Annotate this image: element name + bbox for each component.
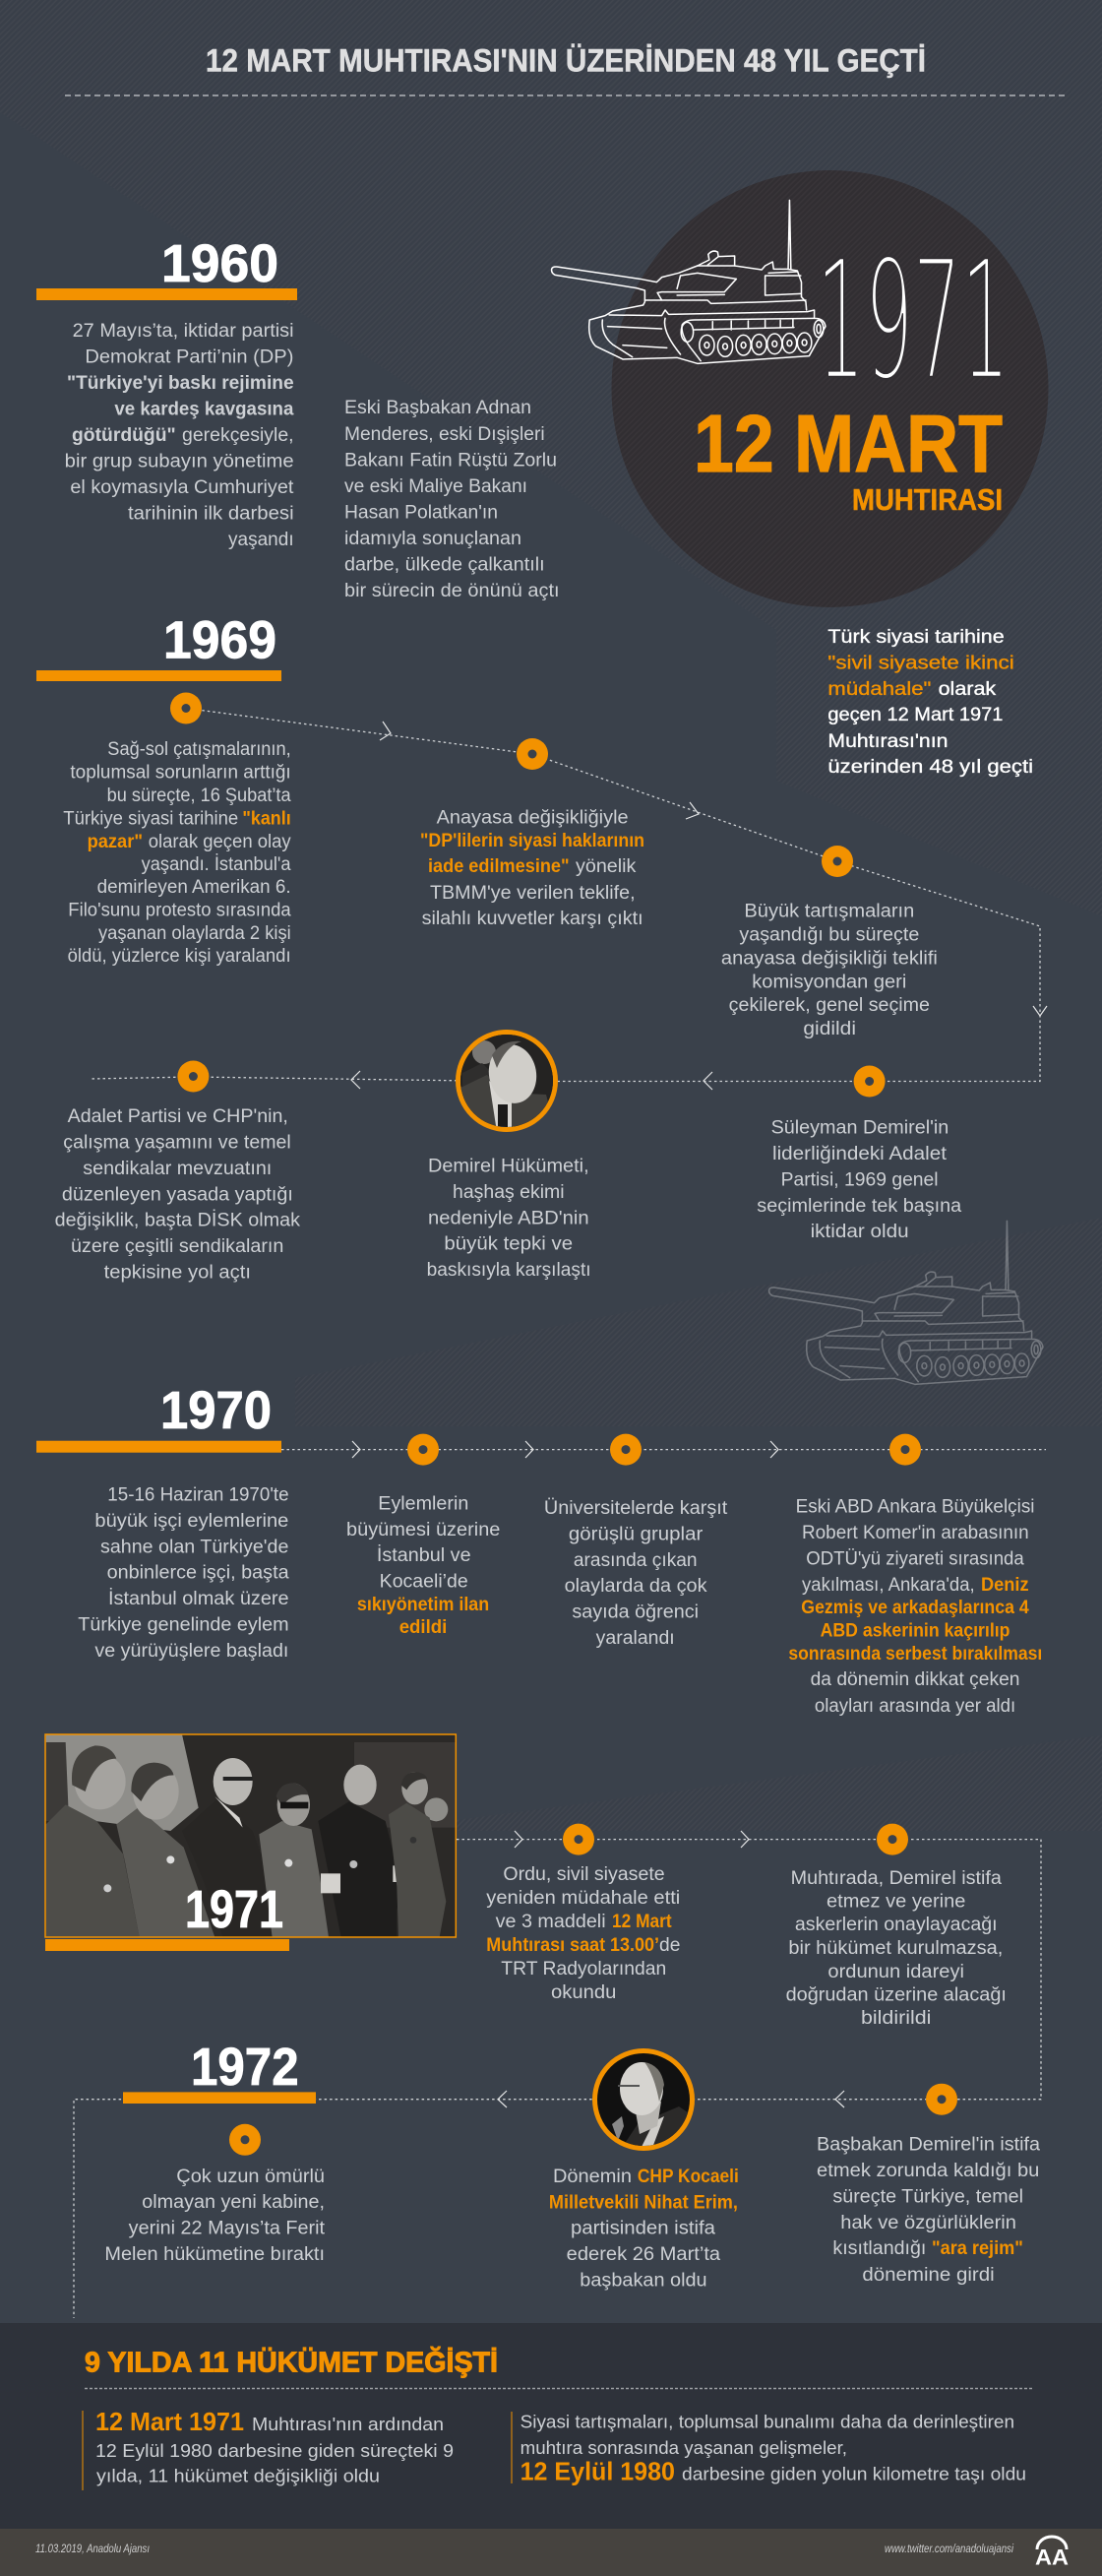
text: anayasa değişikliği: iade edilmesine" xyxy=(428,856,570,877)
heading: 1970 xyxy=(36,1381,281,1453)
text: Nihat Erim: başbakan oldu xyxy=(580,2271,707,2292)
arrow xyxy=(704,1072,712,1090)
arrow xyxy=(741,1831,749,1848)
arrow xyxy=(835,2091,844,2107)
text: kanlı pazar xyxy=(63,739,291,967)
text: muhtıra içeriği: Muhtırada, Demirel istifa xyxy=(791,1868,1002,1889)
text: Süleyman Demirel: Partisi, 1969 genel xyxy=(781,1170,939,1191)
text: sendikalar: üzere çeşitli sendikaların xyxy=(71,1236,283,1257)
text: Deniz Gezmiş: Gezmiş ve arkadaşlarınca 4 xyxy=(801,1598,1029,1618)
text: genel seçim: gidildi xyxy=(803,1019,856,1039)
text: Deniz Gezmiş: Deniz xyxy=(981,1575,1029,1596)
text: Deniz Gezmiş: Robert Komer'in arabasının xyxy=(802,1523,1029,1543)
text: muhtıra içeriği: doğrudan üzerine alacağı xyxy=(786,1985,1007,2006)
text: intro callout: Muhtırası'nın xyxy=(827,731,948,752)
text: ara rejim xyxy=(817,2134,1040,2286)
text: intro callout: Türk siyasi tarihine xyxy=(827,627,1005,648)
left text: yılda, 11 hükümet değişikliği oldu xyxy=(96,2467,380,2486)
dark circle panel: 12 Mart xyxy=(552,170,1049,607)
text: sıkıyönetim xyxy=(346,1494,500,1638)
right text: 12 Eylül 1980 xyxy=(520,2456,675,2485)
footer xyxy=(0,2529,1102,2576)
text: 1960 right block: Hasan Polatkan'ın xyxy=(344,502,498,524)
text: muhtıra içeriği: etmez ve yerine xyxy=(826,1892,965,1912)
text: 1960 right block: Bakanı Fatin Rüştü Zorlu xyxy=(344,451,557,471)
marker dot xyxy=(877,1824,908,1855)
text: muhtıra içeriği xyxy=(786,1868,1007,2029)
left text: 12 Eylül 1980 darbesine giden süreçteki 9 xyxy=(95,2441,454,2461)
marker dot xyxy=(517,738,548,770)
text: kanlı pazar: olarak geçen olay xyxy=(149,832,291,852)
text: 12 Mart saat 13.00 xyxy=(486,1864,680,2003)
marker dot xyxy=(889,1434,921,1466)
arrow xyxy=(525,1441,533,1458)
text: 12 Mart saat 13.00: Ordu, sivil siyasete xyxy=(503,1864,665,1885)
text: genel seçim: Büyük tartışmaların xyxy=(744,902,914,922)
text: Nihat Erim: partisinden istifa xyxy=(571,2219,715,2239)
text: anayasa değişikliği: silahlı kuvvetler karşı çıktı xyxy=(422,909,643,929)
text: 12 Mart saat 13.00: TRT Radyolarından xyxy=(501,1959,666,1979)
text: üniversiteler: arasında çıkan xyxy=(574,1550,698,1571)
text: 1960 left block: el koymasıyla Cumhuriyet xyxy=(70,477,294,498)
text: 12 Mart saat 13.00: ve 3 maddeli xyxy=(496,1912,606,1932)
text: intro callout xyxy=(827,627,1033,778)
text: muhtıra içeriği: ordunun idareyi xyxy=(827,1962,964,1982)
heading: 1972: 1972 xyxy=(191,2038,299,2097)
text: işçi eylemleri: onbinlerce işçi, başta xyxy=(107,1563,289,1584)
left text: 12 Mart 1971 xyxy=(95,2407,244,2436)
arrow xyxy=(686,802,699,819)
text: 1960 right block: idamıyla sonuçlanan xyxy=(344,529,521,549)
text: Deniz Gezmiş: olayları arasında yer aldı xyxy=(815,1696,1015,1717)
text: 1960 left block: gerekçesiyle, xyxy=(182,425,294,446)
marker dot xyxy=(229,2124,261,2156)
text: genel seçim: yaşandığı bu süreçte xyxy=(739,925,919,946)
title: 12 MART MUHTIRASI'NIN ÜZERİNDEN 48 YIL GEÇTİ xyxy=(206,43,926,79)
text: sendikalar: çalışma yaşamını ve temel xyxy=(63,1132,291,1153)
text: genel seçim: anayasa değişikliği teklifi xyxy=(721,949,938,970)
text: 1960 left block: yaşandı xyxy=(228,530,294,550)
text: sendikalar: Adalet Partisi ve CHP'nin, xyxy=(68,1106,288,1127)
text: ara rejim: kısıtlandığı xyxy=(832,2238,926,2259)
heading: 1970: 1970 xyxy=(160,1381,272,1440)
right text: muhtıra sonrasında yaşanan gelişmeler, xyxy=(520,2438,847,2458)
text: intro callout: "sivil siyasete ikinci xyxy=(827,654,1014,674)
text: üniversiteler: olaylarda da çok xyxy=(565,1576,707,1597)
text: haşhaş xyxy=(427,1156,591,1281)
left text xyxy=(83,2407,454,2490)
text: işçi eylemleri: İstanbul olmak üzere xyxy=(108,1589,289,1609)
text: genel seçim: çekilerek, genel seçime xyxy=(729,995,930,1016)
text: Nihat Erim: CHP Kocaeli xyxy=(638,2167,739,2187)
text: haşhaş: büyük tepki ve xyxy=(444,1234,573,1254)
text: işçi eylemleri: büyük işçi eylemlerine xyxy=(94,1511,288,1532)
heading: 9 YILDA 11 HÜKÜMET DEĞİŞTİ xyxy=(85,2345,498,2378)
marker dot xyxy=(854,1065,886,1097)
text: 12 Mart saat 13.00: de xyxy=(659,1935,680,1956)
text: haşhaş: Demirel Hükümeti, xyxy=(428,1156,589,1176)
text: muhtıra içeriği: bir hükümet kurulmazsa, xyxy=(788,1938,1003,1959)
logo: AA xyxy=(1035,2537,1069,2569)
text: intro callout: müdahale" xyxy=(827,679,931,700)
right text: Siyasi tartışmaları, toplumsal bunalımı daha da derinleştiren xyxy=(520,2412,1014,2431)
text: anayasa değişikliği: Anayasa değişikliğiyle xyxy=(437,807,629,828)
text: ara rejim: hak ve özgürlüklerin xyxy=(840,2213,1016,2233)
text: Nihat Erim xyxy=(549,2167,739,2292)
text: üniversiteler: Üniversitelerde karşıt xyxy=(544,1498,728,1519)
text: işçi eylemleri: 15-16 Haziran 1970'te xyxy=(107,1484,289,1506)
text: sendikalar: sendikalar mevzuatını xyxy=(83,1159,272,1179)
heading: Muhtırası: MUHTIRASI xyxy=(852,483,1003,517)
text: ara rejim: dönemine girdi xyxy=(862,2265,995,2286)
text: Deniz Gezmiş: sonrasında serbest bırakılması xyxy=(788,1644,1042,1665)
portrait: Demirel xyxy=(456,1030,558,1132)
text: ara rejim: "ara rejim" xyxy=(932,2238,1023,2259)
text: haşhaş: baskısıyla karşılaştı xyxy=(427,1260,591,1281)
text: kanlı pazar: Türkiye siyasi tarihine xyxy=(63,808,238,829)
text: 1960 left block xyxy=(65,321,294,550)
text: intro callout: geçen 12 Mart 1971 xyxy=(827,705,1003,725)
text: Süleyman Demirel: liderliğindeki Adalet xyxy=(772,1144,948,1164)
text: kanlı pazar: pazar" xyxy=(88,832,143,852)
text: Süleyman Demirel: iktidar oldu xyxy=(811,1222,909,1242)
text: haşhaş: haşhaş ekimi xyxy=(453,1182,565,1203)
text: kanlı pazar: bu süreçte, 16 Şubat’ta xyxy=(107,785,291,806)
text: Deniz Gezmiş: da dönemin dikkat çeken xyxy=(811,1669,1019,1690)
text: 1960 left block: tarihinin ilk darbesi xyxy=(128,504,294,524)
arrow xyxy=(380,722,391,740)
text: genel seçim: komisyondan geri xyxy=(752,973,906,993)
text: ara rejim: Başbakan Demirel'in istifa xyxy=(817,2134,1040,2155)
text: üniversiteler xyxy=(544,1498,728,1649)
icon: faded tank xyxy=(769,1221,1043,1384)
text: muhtıra içeriği: askerlerin onaylayacağı xyxy=(795,1915,998,1935)
date and source: 11.03.2019, Anadolu Ajansı xyxy=(35,2544,150,2555)
text: Ferit Melen xyxy=(104,2167,326,2265)
text: Deniz Gezmiş: Eski ABD Ankara Büyükelçisi xyxy=(796,1497,1035,1518)
arrow xyxy=(352,1441,360,1458)
text: genel seçim xyxy=(721,902,938,1039)
heading: 1960: 1960 xyxy=(161,234,278,293)
text: 1960 right block: ve eski Maliye Bakanı xyxy=(344,476,527,497)
text: işçi eylemleri: sahne olan Türkiye'de xyxy=(100,1538,288,1557)
arrow xyxy=(1033,1006,1047,1016)
text: kanlı pazar: öldü, yüzlerce kişi yaralandı xyxy=(68,946,291,967)
text: kanlı pazar: toplumsal sorunların arttığı xyxy=(70,762,291,783)
text: işçi eylemleri: Türkiye genelinde eylem xyxy=(78,1615,289,1636)
text: 1960 right block: darbe, ülkede çalkantılı xyxy=(344,555,545,575)
icon: tank xyxy=(552,200,826,363)
text: 1960 left block: ve kardeş kavgasına xyxy=(114,400,294,420)
text: 1960 left block: götürdüğü" xyxy=(72,425,176,446)
heading: 1969 xyxy=(36,610,281,681)
text: ara rejim: süreçte Türkiye, temel xyxy=(832,2186,1023,2207)
text: anayasa değişikliği: yönelik xyxy=(576,856,637,877)
marker dot xyxy=(177,1061,209,1093)
text: ara rejim: etmek zorunda kaldığı bu xyxy=(817,2161,1039,2181)
marker dot xyxy=(407,1434,439,1466)
text: muhtıra içeriği: bildirildi xyxy=(861,2008,931,2029)
text: sıkıyönetim: sıkıyönetim ilan xyxy=(357,1595,489,1615)
timeline path: 1969 xyxy=(90,709,1047,1090)
heading: 12 Mart: 12 MART xyxy=(694,398,1003,489)
text: kanlı pazar: yaşanan olaylarda 2 kişi xyxy=(98,923,291,944)
marker dot xyxy=(926,2084,957,2115)
text: 12 Mart saat 13.00: Muhtırası saat 13.00’ xyxy=(486,1935,659,1956)
text: üniversiteler: yaralandı xyxy=(596,1628,675,1649)
text: sıkıyönetim: Kocaeli’de xyxy=(380,1572,468,1593)
arrow xyxy=(770,1441,778,1458)
text: üniversiteler: sayıda öğrenci xyxy=(572,1602,699,1623)
text: sıkıyönetim: edildi xyxy=(399,1617,447,1638)
text: sıkıyönetim: İstanbul ve xyxy=(377,1545,471,1566)
text: kanlı pazar: "kanlı xyxy=(242,808,291,829)
heading: 1969: 1969 xyxy=(163,610,276,669)
text: 1960 right block: Menderes, eski Dışişleri xyxy=(344,424,545,445)
text: 1960 left block: "Türkiye'yi baskı rejimine xyxy=(67,373,294,394)
text: kanlı pazar: Sağ-sol çatışmalarının, xyxy=(107,739,291,760)
marker dot xyxy=(610,1434,642,1466)
text: Nihat Erim: ederek 26 Mart’ta xyxy=(567,2244,721,2265)
photo: 1971 generals xyxy=(45,1734,456,1951)
text: Süleyman Demirel: seçimlerinde tek başına xyxy=(757,1196,962,1217)
marker dot xyxy=(170,693,202,724)
right text xyxy=(512,2412,1026,2485)
timeline path: 1971 to 1972 xyxy=(74,1831,1041,2318)
marker dot xyxy=(822,846,853,877)
text: sıkıyönetim: büyümesi üzerine xyxy=(346,1520,500,1540)
text: haşhaş: nedeniyle ABD'nin xyxy=(428,1209,589,1228)
panel: 9 yılda 11 hükümet xyxy=(0,2323,1102,2529)
text: anayasa değişikliği: "DP'lilerin siyasi haklarının xyxy=(420,831,644,851)
text: üniversiteler: görüşlü gruplar xyxy=(569,1524,704,1545)
left text: Muhtırası'nın ardından xyxy=(252,2415,444,2434)
text: 12 Mart saat 13.00: 12 Mart xyxy=(612,1912,672,1932)
text: 1960 left block: Demokrat Parti’nin (DP) xyxy=(85,347,293,368)
logo: AA: AA xyxy=(1035,2545,1069,2569)
text: işçi eylemleri: ve yürüyüşlere başladı xyxy=(94,1641,288,1662)
text: intro callout: üzerinden 48 yıl geçti xyxy=(827,757,1033,778)
text: Deniz Gezmiş: ODTÜ'yü ziyareti sırasında xyxy=(806,1548,1024,1569)
text: 1960 left block: 27 Mayıs’ta, iktidar partisi xyxy=(73,321,294,342)
text: Ferit Melen: olmayan yeni kabine, xyxy=(142,2192,325,2213)
text: intro callout: olarak xyxy=(939,679,997,700)
heading: 1960 xyxy=(36,234,297,300)
heading: 1972 xyxy=(123,2038,316,2104)
text: Ferit Melen: yerini 22 Mayıs’ta Ferit xyxy=(129,2219,326,2239)
website: www.twitter.com/anadoluajansi xyxy=(885,2544,1013,2555)
text: işçi eylemleri xyxy=(78,1484,289,1662)
arrow xyxy=(351,1071,360,1089)
portrait: Nihat Erim xyxy=(592,2048,699,2156)
text: Süleyman Demirel xyxy=(757,1118,962,1242)
text: 1960 right block: Eski Başbakan Adnan xyxy=(344,398,531,418)
text: 1960 left block: bir grup subayın yönetime xyxy=(65,451,294,472)
text: 12 Mart saat 13.00: okundu xyxy=(551,1982,616,2003)
text: kanlı pazar: yaşandı. İstanbul'a xyxy=(142,854,291,875)
text: anayasa değişikliği: TBMM'ye verilen teklife, xyxy=(430,883,636,904)
right text: darbesine giden yolun kilometre taşı oldu xyxy=(682,2464,1026,2483)
text: sendikalar: düzenleyen yasada yaptığı xyxy=(62,1185,293,1205)
text: kanlı pazar: Filo'sunu protesto sırasında xyxy=(68,901,291,921)
text: 12 Mart saat 13.00: yeniden müdahale etti xyxy=(486,1888,680,1909)
text: sendikalar: değişiklik, başta DİSK olmak xyxy=(55,1211,301,1230)
heading: 1971: 1971 xyxy=(185,1880,283,1939)
text: sıkıyönetim: Eylemlerin xyxy=(378,1494,468,1514)
text: Nihat Erim: Milletvekili Nihat Erim, xyxy=(549,2192,738,2213)
arrow xyxy=(498,2091,507,2107)
arrow xyxy=(515,1831,522,1848)
text: Ferit Melen: Çok uzun ömürlü xyxy=(176,2167,325,2187)
text: Süleyman Demirel: Süleyman Demirel'in xyxy=(771,1118,949,1139)
timeline path: 1970 xyxy=(281,1441,1046,1458)
text: Ferit Melen: Melen hükümetine bıraktı xyxy=(104,2244,325,2265)
text: 1960 right block: bir sürecin de önünü açtı xyxy=(344,581,560,601)
text: anayasa değişikliği xyxy=(420,807,644,929)
text: Nihat Erim: Dönemin xyxy=(553,2167,632,2187)
text: sendikalar xyxy=(55,1106,301,1284)
text: 1960 right block xyxy=(344,398,560,601)
marker dot xyxy=(563,1824,594,1855)
text: Deniz Gezmiş: yakılması, Ankara'da, xyxy=(802,1575,975,1596)
text: sendikalar: tepkisine yol açtı xyxy=(104,1263,251,1284)
text: Deniz Gezmiş xyxy=(788,1497,1042,1717)
text: Deniz Gezmiş: ABD askerinin kaçırılıp xyxy=(821,1620,1010,1641)
text: kanlı pazar: demirleyen Amerikan 6. xyxy=(97,877,291,898)
